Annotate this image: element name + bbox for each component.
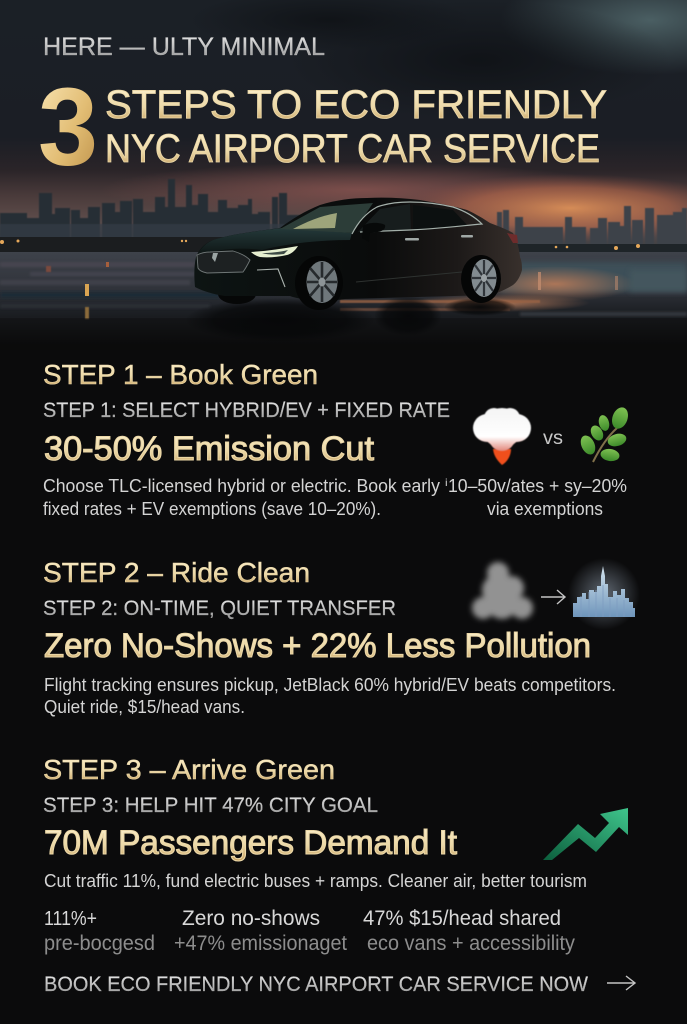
stat 2: +47% emissionaget: [174, 932, 347, 955]
title: [38, 66, 607, 189]
title line 2: NYC AIRPORT CAR SERVICE: [105, 127, 600, 171]
windshield: [280, 203, 373, 233]
icon: glowing city: [568, 558, 640, 630]
headlight: [251, 246, 298, 257]
lower lights: [257, 269, 285, 287]
icon: white cloud with flame: [473, 408, 531, 465]
step 2 body: Quiet ride, $15/head vans.: [44, 696, 245, 717]
icon: smoke cloud: [472, 562, 533, 619]
ground shadow: [185, 296, 516, 342]
stat 2: [174, 907, 347, 955]
step 1 stat: 30-50% Emission Cut: [44, 430, 375, 468]
mirror: [362, 223, 385, 242]
low front tire: [218, 284, 256, 304]
step 1 body: [43, 475, 627, 519]
step 1 body: fixed rates + EV exemptions (save 10–20%).: [43, 498, 381, 519]
shoreline: [0, 237, 300, 254]
step 2 heading: STEP 2 – Ride Clean: [43, 557, 310, 588]
icon: green leaf branch: [578, 405, 631, 462]
car body: [194, 198, 522, 300]
step 2 body: [44, 674, 616, 717]
water reflections: [0, 262, 687, 319]
step 2 subheading: STEP 2: ON-TIME, QUIET TRANSFER: [43, 597, 396, 620]
icon: emission cloud vs leaf: [473, 405, 631, 465]
title line 1: STEPS TO ECO FRIENDLY: [105, 83, 607, 127]
grille: [197, 251, 250, 273]
vs label: vs: [543, 428, 563, 449]
sill: [356, 272, 462, 282]
step 1 heading: STEP 1 – Book Green: [43, 359, 318, 390]
panel: step 2: [43, 557, 616, 717]
step 3 body: Cut traffic 11%, fund electric buses + ramps. Cleaner air, better tourism: [44, 870, 587, 891]
stat 3: [363, 907, 575, 955]
step 3 subheading: STEP 3: HELP HIT 47% CITY GOAL: [43, 794, 378, 817]
step 1 subheading: STEP 1: SELECT HYBRID/EV + FIXED RATE: [43, 399, 450, 422]
step 3 stat: 70M Passengers Demand It: [44, 824, 458, 862]
door handles: [405, 235, 473, 240]
rear wheel: [461, 255, 501, 303]
city skyline left: [0, 179, 307, 243]
panel: step 3: [43, 754, 587, 891]
stat 3: eco vans + accessibility: [367, 932, 575, 955]
step 2 body: Flight tracking ensures pickup, JetBlack 60% hybrid/EV beats competitors.: [44, 674, 616, 695]
city skyline right: [497, 206, 687, 246]
front wheel: [295, 256, 343, 310]
arrow: [541, 590, 565, 604]
stat 1: [44, 908, 155, 955]
numeral 3: 3: [38, 66, 98, 189]
car: [185, 198, 522, 342]
fade to black under hero: [0, 318, 687, 350]
stats row: [44, 907, 575, 955]
icon: smoke to clean city: [472, 558, 640, 630]
shore lights: [0, 240, 640, 250]
hood highlight: [197, 228, 352, 256]
header tagline: HERE — ULTY MINIMAL: [43, 33, 325, 61]
chrome window line: [352, 202, 482, 234]
stat 1: pre-bocgesd: [44, 932, 155, 955]
call to action: BOOK ECO FRIENDLY NYC AIRPORT CAR SERVICE NOW: [44, 973, 588, 996]
stat 3: 47% $15/head shared: [363, 907, 561, 930]
hero scene: sky, skyline, wet ground: [0, 0, 687, 350]
icon: green growth arrow: [543, 808, 628, 860]
stat 1: 111%+: [44, 908, 97, 930]
panel: step 1: [43, 359, 627, 519]
step 1 body: via exemptions: [487, 498, 603, 519]
arrow: [607, 976, 635, 990]
stat 2: Zero no-shows: [182, 907, 320, 930]
side windows: [358, 204, 411, 232]
step 1 body: Choose TLC-licensed hybrid or electric. Book early ⁱ10–50v/ates + sy–20%: [43, 475, 627, 496]
rear light: [507, 233, 518, 243]
step 3 heading: STEP 3 – Arrive Green: [43, 754, 335, 785]
step 2 stat: Zero No-Shows + 22% Less Pollution: [44, 627, 591, 665]
